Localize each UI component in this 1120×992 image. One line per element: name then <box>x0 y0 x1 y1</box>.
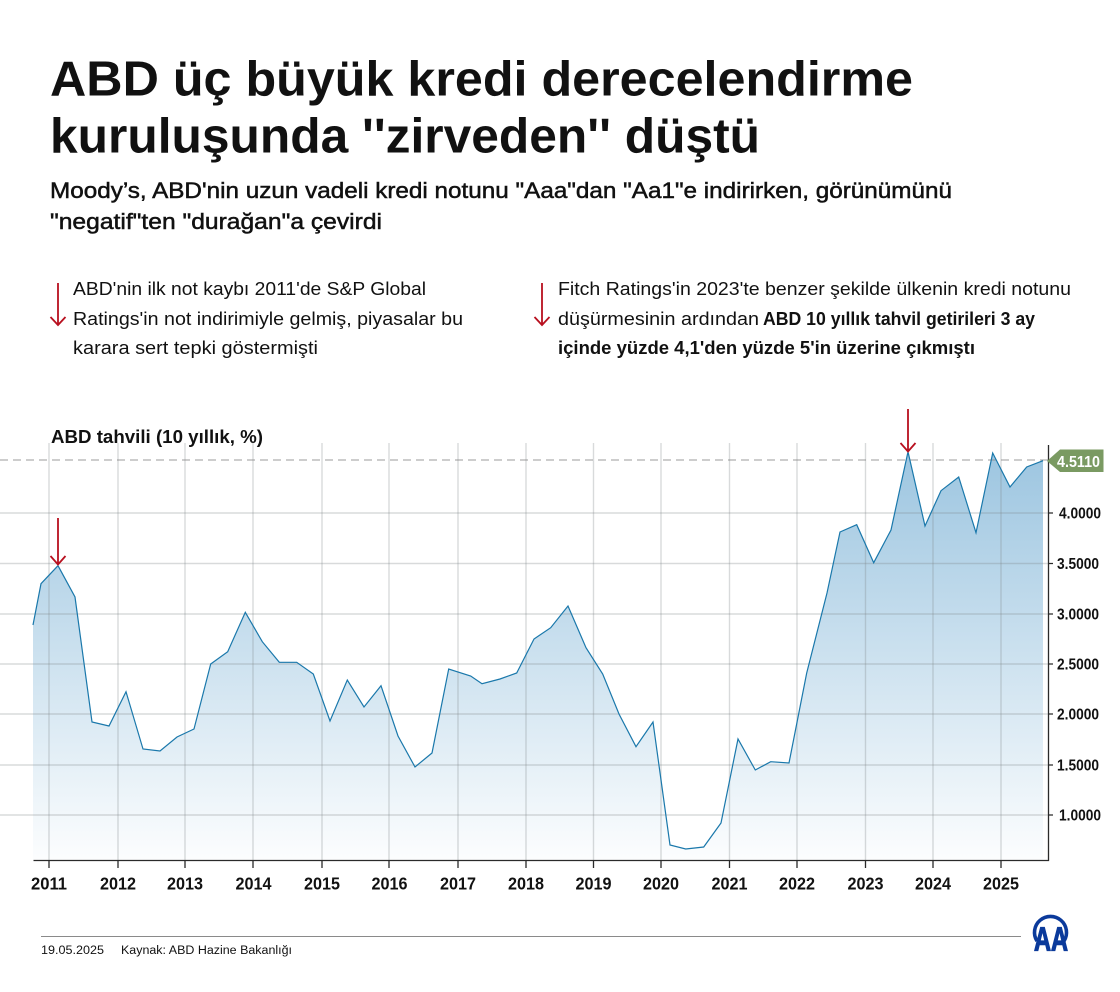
current value tag: 4.5110 <box>1057 454 1100 471</box>
x axis labels: 2012 <box>100 874 136 894</box>
text block: right note: Fitch Ratings'in 2023'te benzer şekilde ülkenin kredi notunu <box>558 278 1071 299</box>
title: kuruluşunda ''zirveden'' düştü <box>50 108 760 164</box>
icon: AA logo: AA <box>1034 920 1068 958</box>
x axis labels: 2021 <box>712 874 748 894</box>
x axis labels: 2013 <box>167 874 203 894</box>
x axis labels: 2024 <box>915 874 951 894</box>
current value tag <box>1047 450 1104 472</box>
x axis labels: 2019 <box>576 874 612 894</box>
y axis labels: 3.0000 <box>1057 606 1099 624</box>
x axis labels: 2014 <box>236 874 272 894</box>
subtitle <box>50 178 952 234</box>
x axis labels: 2017 <box>440 874 476 894</box>
y axis labels: 1.5000 <box>1057 758 1099 774</box>
text block: right note: içinde yüzde 4,1'den yüzde 5'in üzerine çıkmıştı <box>558 337 975 358</box>
icon: right red arrow <box>534 283 550 325</box>
source: Kaynak: ABD Hazine Bakanlığı <box>121 945 292 957</box>
y axis labels <box>1057 506 1101 824</box>
title <box>50 52 913 164</box>
date: 19.05.2025 <box>41 945 104 957</box>
subtitle: Moody’s, ABD'nin uzun vadeli kredi notunu "Aaa"dan "Aa1"e indirirken, görünümünü <box>50 178 952 203</box>
text block: left note: Ratings'in not indirimiyle gelmiş, piyasalar bu <box>73 308 463 329</box>
text block: right note: düşürmesinin ardından <box>558 308 759 329</box>
text block: left note: karara sert tepki göstermişti <box>73 337 318 358</box>
icon: AA logo <box>1034 916 1068 958</box>
axis ticks <box>49 513 1053 868</box>
text block: right note <box>558 278 1071 358</box>
x axis labels: 2022 <box>779 874 815 894</box>
y axis labels: 1.0000 <box>1059 808 1101 824</box>
footer <box>41 936 1021 957</box>
axes <box>34 445 1048 860</box>
title: ABD üç büyük kredi derecelendirme <box>50 52 913 106</box>
arrow: 2023 downgrade <box>900 409 916 452</box>
area under the line <box>33 452 1043 860</box>
y axis labels: 4.0000 <box>1059 506 1101 522</box>
data line <box>33 452 1043 849</box>
x axis labels: 2018 <box>508 874 544 894</box>
icon: left red arrow <box>50 283 66 325</box>
chart: US 10-year treasury yield <box>0 409 1104 894</box>
x axis labels: 2023 <box>848 874 884 894</box>
x axis labels: 2015 <box>304 874 340 894</box>
text block: right note: ABD 10 yıllık tahvil getirileri 3 ay <box>763 308 1036 329</box>
x axis labels <box>31 874 1019 894</box>
x axis labels: 2020 <box>643 874 679 894</box>
text block: left note <box>73 278 463 358</box>
y axis labels: 2.0000 <box>1057 706 1099 724</box>
x axis labels: 2025 <box>983 874 1019 894</box>
x axis labels: 2016 <box>372 874 408 894</box>
x axis labels: 2011 <box>31 874 67 894</box>
subtitle: "negatif"ten "durağan"a çevirdi <box>50 209 382 234</box>
chart title: ABD tahvili (10 yıllık, %) <box>51 427 263 447</box>
text block: left note: ABD'nin ilk not kaybı 2011'de S&P Global <box>73 278 426 299</box>
arrow: 2011 downgrade <box>50 518 66 564</box>
y axis labels: 3.5000 <box>1057 556 1099 573</box>
y axis labels: 2.5000 <box>1057 656 1099 674</box>
